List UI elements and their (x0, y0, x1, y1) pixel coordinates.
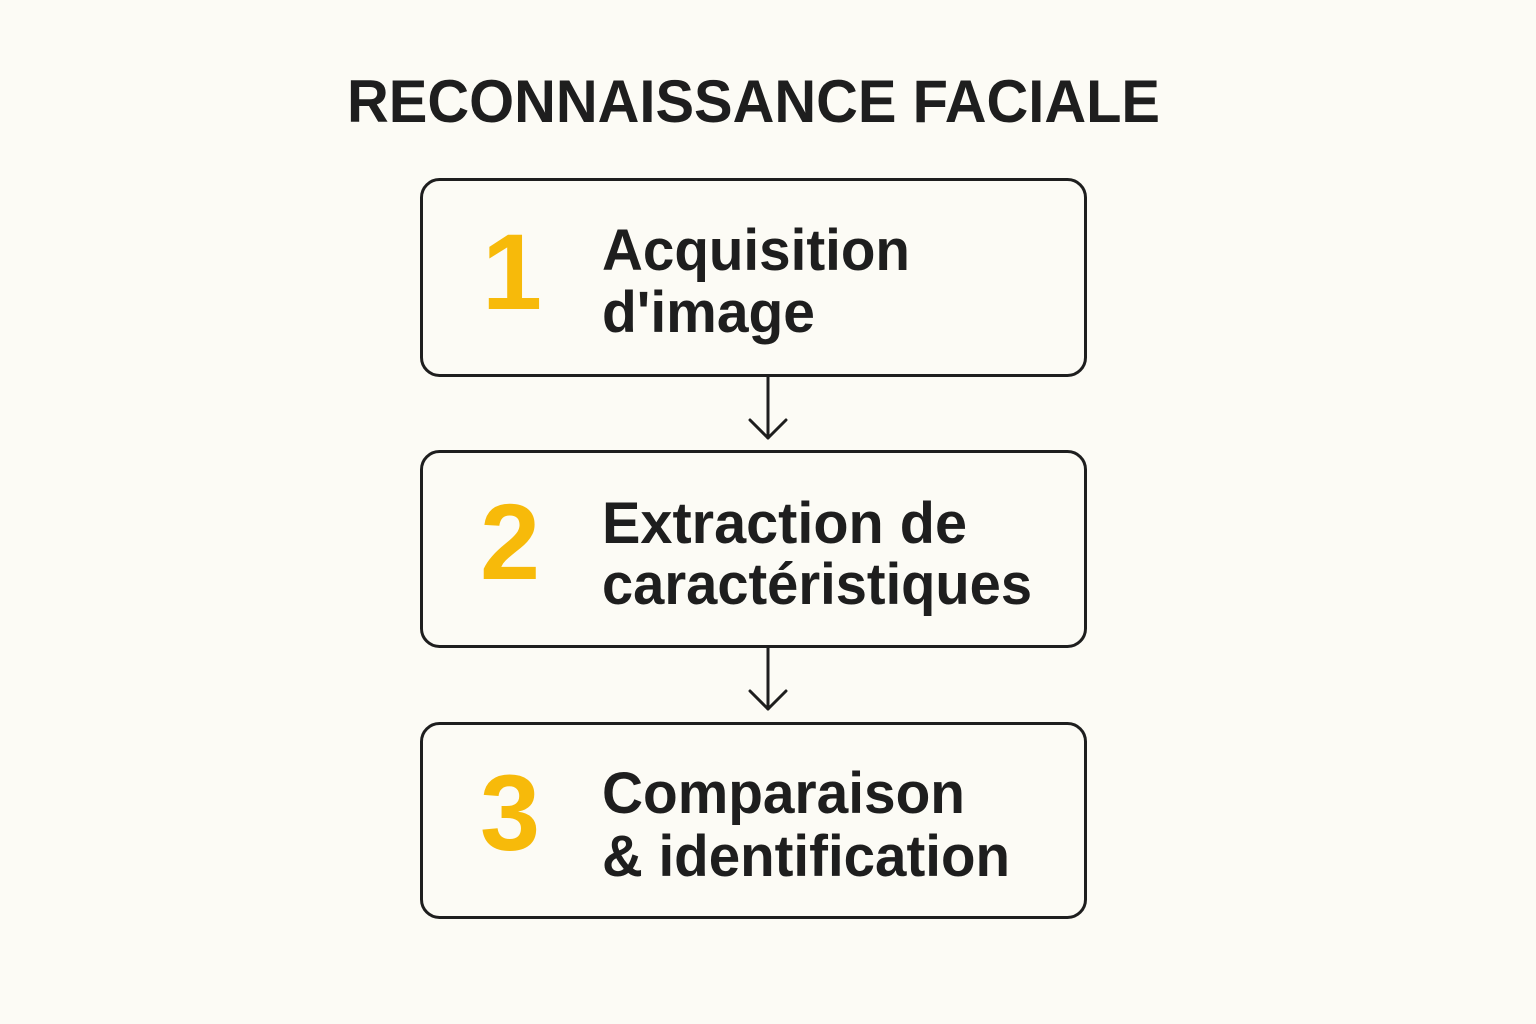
step 2 label (602, 491, 1032, 617)
step 2 box (422, 452, 1086, 646)
step 1 label: d'image (602, 280, 815, 345)
step 3 label: Comparaison (602, 761, 965, 826)
step 2 label: caractéristiques (602, 552, 1032, 617)
step 1 label (602, 218, 910, 345)
step 3 label (602, 761, 1010, 889)
step 1 label: Acquisition (602, 218, 910, 283)
number 2: 2 (480, 481, 540, 602)
step 1 box (422, 180, 1086, 376)
step 2 label: Extraction de (602, 491, 967, 556)
number 3: 3 (480, 752, 540, 873)
step 3 label: & identification (602, 824, 1010, 889)
arrow 1 to 2 (750, 377, 786, 438)
number 1: 1 (482, 211, 542, 332)
title: RECONNAISSANCE FACIALE (347, 68, 1160, 135)
step 3 box (422, 724, 1086, 918)
arrow 2 to 3 (750, 648, 786, 709)
